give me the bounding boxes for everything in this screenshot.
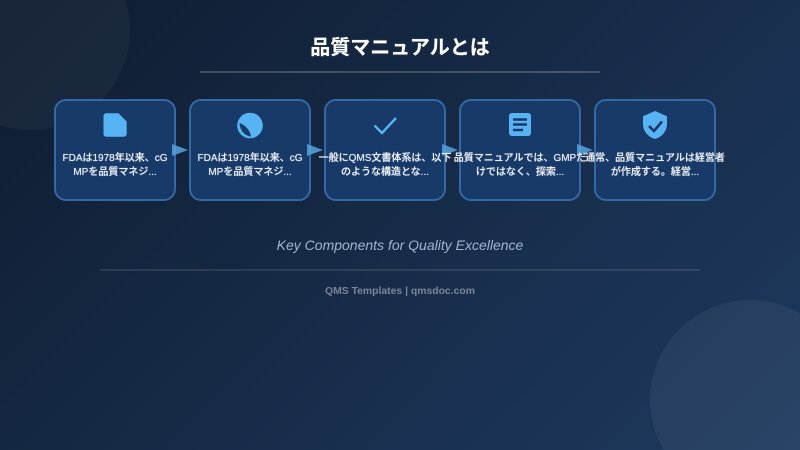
card 3 text: のような構造とな... [341,166,429,178]
card 1 text: MPを品質マネジ... [73,166,157,178]
footer divider [100,269,700,271]
footer text: QMS Templates | qmsdoc.com [325,286,475,297]
card 2 text: FDAは1978年以来、cG [197,152,303,164]
icon: shield check [643,111,667,139]
card 2 text: MPを品質マネジ... [208,166,292,178]
title underline [200,71,600,73]
card 4 text [454,152,586,178]
icon: check [374,117,397,135]
card 1 text [62,152,168,178]
arrow 1 [172,144,188,156]
card 5 text: が作成する。経営... [611,166,699,178]
subtitle: Key Components for Quality Excellence [277,237,523,253]
title: 品質マニュアルとは [310,37,490,59]
icon: circle with leaf [237,112,263,138]
card 4 [459,99,581,201]
card 4 text: けではなく、探索... [476,166,564,178]
card 3 text [318,152,452,178]
icon: document [104,113,127,137]
card 4 text: 品質マニュアルでは、GMPだ [454,152,586,164]
card 5 [594,99,716,201]
card 3 text: 一般にQMS文書体系は、以下 [319,152,451,164]
arrow 3 [442,144,458,156]
icon: article [509,113,531,136]
card 5 text: 通常、品質マニュアルは経営者 [585,152,725,164]
arrow 2 [307,144,323,156]
card 2 text [197,152,303,178]
card 2 [189,99,311,201]
card 1 [54,99,176,201]
card 5 text [585,152,725,178]
card 3 [324,99,446,201]
card 1 text: FDAは1978年以来、cG [62,152,168,164]
arrow 4 [577,144,593,156]
